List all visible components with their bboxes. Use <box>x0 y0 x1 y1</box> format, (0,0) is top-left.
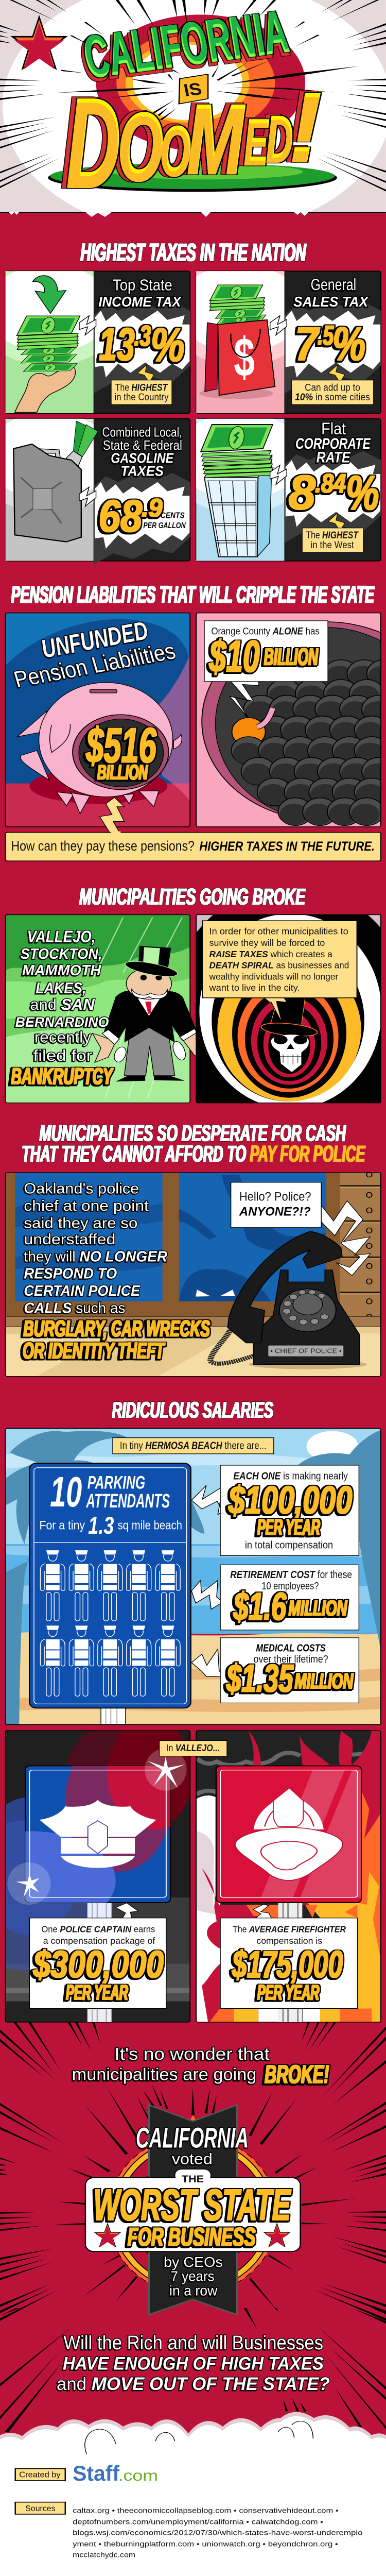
text: oakland police chief: RESPOND TO <box>24 1266 117 1282</box>
panel: firefighter <box>196 1731 381 2023</box>
panel frame <box>6 1731 190 2022</box>
callout: death spiral: RAISE TAXES which creates a <box>209 950 332 959</box>
text: oakland police chief: said they are so <box>24 1215 137 1231</box>
title word: doomed: D <box>66 72 120 214</box>
title word: doomed: E <box>244 106 269 178</box>
text: oakland police chief: understaffed <box>24 1231 115 1247</box>
sign heading: PARKING <box>87 1472 145 1493</box>
background tint <box>196 271 284 413</box>
jagged backdrop <box>94 301 190 394</box>
hole with figure <box>73 715 169 790</box>
note: highest in the country: The HIGHEST <box>115 382 168 393</box>
box: medical costs <box>220 1638 359 1703</box>
icon: rotary phone <box>210 1231 367 1369</box>
state name: CALIFORNIA <box>136 2122 249 2154</box>
title word: doomed: ! <box>289 72 321 182</box>
text: no wonder <box>72 2044 329 2089</box>
panel frame <box>196 613 381 827</box>
label: unfunded pension liabilities <box>11 616 179 692</box>
label: top state income tax: INCOME TAX <box>98 294 182 310</box>
head <box>126 968 171 999</box>
callout: orange county alone <box>204 621 328 682</box>
text: crime list <box>23 1316 210 1363</box>
sign subheading <box>40 1512 182 1539</box>
label: general sales tax: SALES TAX <box>293 294 369 310</box>
sign heading <box>50 1468 170 1516</box>
text: oakland police chief: CERTAIN POLICE <box>24 1283 141 1299</box>
number burst <box>286 311 380 377</box>
pictogram: ten attendants <box>40 1551 180 1696</box>
section: highest taxes <box>0 240 381 565</box>
sign subheading: 1.3 <box>88 1512 114 1539</box>
note: highest in the west <box>302 528 363 552</box>
text: cities filing bankruptcy: MAMMOTH <box>22 962 101 979</box>
sources label <box>15 2502 65 2514</box>
sources list: mcclatchydc.com <box>73 2550 135 2559</box>
created by label: Created by <box>19 2470 61 2479</box>
spiral rings <box>197 915 380 1103</box>
panel: bankruptcy <box>6 914 208 1103</box>
section: municipalities going broke <box>5 888 381 1162</box>
text: cities filing bankruptcy: STOCKTON, <box>21 946 102 962</box>
speed lines <box>0 2308 386 2432</box>
section: hermosa beach <box>5 1428 381 1724</box>
connector bolt <box>253 1904 272 1919</box>
section: police <box>6 1172 381 1422</box>
night backdrop with lights <box>0 1719 193 2022</box>
number: 13.3 percent: % <box>151 319 185 371</box>
icon: left star <box>95 2224 120 2247</box>
panel frame <box>196 914 381 1103</box>
speed lines <box>0 0 386 192</box>
sign heading: ATTENDANTS <box>86 1490 170 1512</box>
callout: death spiral: DEATH SPIRAL as businesses and <box>209 960 349 971</box>
text: no wonder: municipalities are going <box>72 2064 256 2084</box>
title word: doomed: D <box>267 103 293 176</box>
phone cord <box>210 1329 254 1364</box>
panel frame <box>196 1731 381 2022</box>
box: each one: in total compensation <box>245 1539 333 1551</box>
panel: police captain <box>5 1730 190 2023</box>
label: gasoline taxes: State & Federal <box>103 438 182 453</box>
text: oakland police chief: they will NO LONGER <box>24 1248 168 1265</box>
trouser pockets <box>112 1041 188 1063</box>
panel: top state income tax <box>5 270 190 414</box>
label: general sales tax <box>293 276 369 310</box>
label: flat corporate rate: RATE <box>317 449 351 466</box>
callout: in tiny hermosa beach: In tiny HERMOSA BEACH there are... <box>120 1439 267 1451</box>
cloud <box>0 2412 386 2484</box>
note: highest in the country <box>111 380 172 404</box>
worst state badge <box>85 2105 301 2315</box>
label: flat corporate rate <box>295 420 371 466</box>
text: no wonder: It's no wonder that <box>114 2044 270 2063</box>
text: by ceos: 7 years <box>170 2268 215 2284</box>
note: up to 10 percent: 10% in some cities <box>295 392 370 403</box>
sign board <box>216 1766 361 1903</box>
box: firefighter <box>220 1918 357 2009</box>
label: gasoline taxes: Combined Local, <box>102 425 182 439</box>
icon: bills in nozzle <box>66 421 98 466</box>
label: gasoline taxes: GASOLINE <box>111 450 174 466</box>
icon: hand <box>15 365 75 412</box>
sign post <box>101 1708 126 1724</box>
sign subheading: For a tiny <box>40 1518 85 1532</box>
banner: how can they pay: How can they pay these pensions? <box>11 839 195 854</box>
note: highest in the west: in the West <box>311 540 354 551</box>
text: no wonder: BROKE! <box>265 2060 329 2089</box>
note: up to 10 percent <box>292 380 374 404</box>
icon: office building <box>204 455 272 557</box>
green money rain backdrop <box>6 914 190 1103</box>
window right with monster <box>179 1173 326 1301</box>
box: police captain <box>29 1918 166 2009</box>
number: 68.9 cents per gallon: 68 <box>98 491 143 541</box>
state name: voted <box>172 2150 213 2167</box>
number: 7.5 percent: 7 <box>295 318 320 370</box>
box: police captain: $300,000 <box>33 1944 164 1986</box>
text: cities filing bankruptcy <box>11 928 114 1089</box>
callout: in vallejo <box>159 1741 227 1756</box>
state name <box>136 2122 249 2167</box>
callout: hello police: ANYONE?!? <box>239 1205 311 1218</box>
sky and floor <box>6 613 199 827</box>
label: top state income tax: Top State <box>113 276 172 294</box>
hole with figure: BILLION <box>97 760 148 784</box>
title word: doomed: M <box>187 84 245 195</box>
box: medical costs: over their lifetime? <box>254 1653 328 1665</box>
badge: is: IS <box>182 79 203 100</box>
hands and cuffs <box>92 1029 208 1062</box>
sign post <box>278 1903 302 2022</box>
box: medical costs: MEDICAL COSTS <box>256 1641 326 1654</box>
callout: death spiral: survive they will be forced to <box>209 938 325 948</box>
header backdrop <box>0 0 386 213</box>
headline: for business: FOR BUSINESS <box>128 2222 256 2251</box>
label: unfunded pension liabilities: UNFUNDED <box>38 616 151 663</box>
text: by ceos: in a row <box>169 2282 218 2299</box>
phone dial <box>279 1289 336 1332</box>
spiked medal <box>108 2115 278 2294</box>
panel frame <box>6 1173 381 1377</box>
callout bolt <box>328 513 345 531</box>
callout: in vallejo: In VALLEJO... <box>166 1742 220 1753</box>
label tab <box>175 2169 211 2188</box>
phone name plate <box>268 1346 343 1357</box>
panel: general sales tax <box>196 270 381 414</box>
jagged backdrop <box>284 451 381 543</box>
panel frame <box>6 271 190 413</box>
sources list: deptofnumbers.com/unemployment/california • calwatchdog.com • <box>73 2517 323 2526</box>
icon: shopping bag <box>205 320 275 395</box>
light flares <box>7 1749 187 1905</box>
box: medical costs: $1.35 <box>226 1657 294 1700</box>
sources list: yment • theburningplatform.com • unionwatch.org • beyondchron.org • <box>73 2540 338 2548</box>
speed lines <box>0 2022 386 2321</box>
text: cities filing bankruptcy: and SAN <box>30 996 95 1013</box>
header: title artwork <box>0 0 386 236</box>
phone name plate: • CHIEF OF POLICE • <box>270 1347 342 1355</box>
section: vallejo <box>0 1719 381 2023</box>
text: oakland police chief: CALLS such as <box>24 1300 125 1316</box>
box: police captain: One POLICE CAPTAIN earns <box>41 1924 155 1935</box>
section: footer <box>0 2308 386 2559</box>
box: retirement cost: 10 employees? <box>261 1580 319 1591</box>
callout bolt <box>100 798 125 834</box>
text: oakland police chief: Oakland's police <box>24 1181 139 1197</box>
icon: police cap <box>40 1800 156 1868</box>
panel frame <box>6 419 190 561</box>
trousers <box>125 1026 175 1076</box>
callout: death spiral: want to live in the city. <box>209 983 300 993</box>
ribbon <box>149 2105 237 2315</box>
beach backdrop <box>5 1428 381 1724</box>
logo: staff.com: Staff <box>73 2461 120 2485</box>
speech tail <box>264 995 287 1022</box>
sign heading: 10 <box>50 1468 82 1516</box>
jacket <box>103 991 197 1043</box>
icon: money stack <box>17 316 80 372</box>
number burst <box>95 482 189 549</box>
sources label: Sources <box>25 2504 56 2513</box>
text: cities filing bankruptcy: LAKES, <box>36 979 86 997</box>
text: by ceos <box>164 2254 223 2299</box>
shirt and tie <box>138 998 160 1016</box>
icon: money stack <box>201 424 274 478</box>
created by label <box>15 2469 65 2481</box>
sign post <box>87 1903 112 2022</box>
note: up to 10 percent: Can add up to <box>305 382 360 393</box>
icon: piggy bank <box>17 683 182 814</box>
text: cities filing bankruptcy: BERNARDINO <box>15 1014 109 1030</box>
rotten apple barrel <box>196 613 386 827</box>
word: the: THE <box>182 2174 204 2184</box>
number: 68.9 cents per gallon: CENTS <box>161 511 185 520</box>
sign board <box>25 1765 171 1903</box>
number: 13.3 percent: .3 <box>134 320 151 352</box>
callout: orange county alone: BILLION <box>264 644 319 670</box>
phone shadow <box>249 1360 367 1369</box>
section: pension liabilities <box>6 582 386 861</box>
green ground oval <box>48 163 337 192</box>
jagged backdrop <box>284 301 381 394</box>
label: top state income tax <box>98 276 182 310</box>
number burst <box>95 311 189 377</box>
connector bolt <box>116 1903 138 1919</box>
sign board <box>29 1463 191 1708</box>
pig details <box>50 689 117 753</box>
icon: jerry can <box>13 444 81 542</box>
label: gasoline taxes: TAXES <box>120 463 164 479</box>
panel: bankruptcy: BANKRUPTCY <box>11 1063 114 1089</box>
icon: fire helmet <box>235 1788 343 1880</box>
top hat <box>124 946 180 979</box>
white burst circle <box>3 0 386 236</box>
text: oakland police chief <box>24 1181 168 1316</box>
fire sign <box>216 1766 361 1903</box>
police sign <box>0 1719 203 1930</box>
panel frame <box>6 914 190 1103</box>
phone base <box>254 1270 359 1364</box>
callout: orange county alone: Orange County ALONE has <box>211 625 320 637</box>
sign subheading: sq mile beach <box>118 1518 182 1532</box>
floor <box>6 1327 381 1377</box>
box: retirement cost: RETIREMENT COST for these <box>230 1568 352 1581</box>
callout: orange county alone: $10 <box>209 632 260 681</box>
connector bolt <box>79 487 96 506</box>
text: cities filing bankruptcy: recently <box>34 1028 91 1046</box>
parking attendants sign <box>29 1463 191 1708</box>
icon: tycoon character <box>92 946 208 1081</box>
note: highest in the west: The HIGHEST <box>306 530 359 541</box>
box: retirement cost: $1.6 <box>233 1585 287 1628</box>
title word: doomed: O <box>160 112 191 191</box>
text: cities filing bankruptcy: VALLEJO, <box>27 928 96 946</box>
concentric rings behind title <box>96 14 305 151</box>
connector bolt <box>270 465 287 485</box>
sources list <box>73 2506 363 2559</box>
callout: death spiral <box>202 921 357 998</box>
speech tail: ring bolt <box>319 1201 371 1276</box>
heading: cannot afford police <box>22 1121 365 1167</box>
icon: california star <box>12 17 66 70</box>
hole with figure: $516 <box>86 718 156 773</box>
callout bolt <box>137 365 154 382</box>
number: 68.9 cents per gallon: PER GALLON <box>143 520 186 530</box>
number: 7.5 percent: % <box>332 318 365 370</box>
white plate <box>85 2178 301 2251</box>
text: will the rich <box>57 2332 330 2394</box>
note: highest in the country: in the Country <box>114 392 169 403</box>
icon: green arrow <box>33 276 66 313</box>
number: 68.9 cents per gallon: .9 <box>142 494 163 522</box>
label: gasoline taxes <box>102 425 182 479</box>
icon: shopping bag: $ <box>234 326 255 388</box>
panel frame <box>6 1428 381 1724</box>
icon: money above bag <box>209 285 266 325</box>
label: general sales tax: General <box>311 276 356 294</box>
connector bolt <box>270 316 287 335</box>
fire backdrop <box>196 1731 381 2023</box>
box: police captain: a compensation package of <box>43 1936 155 1946</box>
background tint <box>5 271 94 413</box>
text: crime list: OR IDENTITY THEFT <box>23 1338 165 1363</box>
box: each one: EACH ONE is making nearly <box>233 1469 348 1482</box>
section: conclusion <box>0 2022 386 2321</box>
box: firefighter: compensation is <box>256 1936 322 1946</box>
callout: in tiny hermosa beach <box>113 1438 274 1454</box>
callout: hello police: Hello? Police? <box>239 1190 311 1204</box>
plate tab fill <box>176 2177 210 2179</box>
text: cities filing bankruptcy: filed for <box>33 1047 92 1064</box>
bolt connectors <box>191 1485 223 1676</box>
badge: is <box>179 74 208 104</box>
panel frame <box>6 613 190 827</box>
callout: death spiral: wealthy individuals will no longer <box>209 972 338 982</box>
number burst <box>286 460 380 527</box>
callout: hello police <box>231 1182 321 1228</box>
sources list: caltax.org • theeconomiccollapseblog.com • conservativehideout.com • <box>73 2506 339 2515</box>
room wood backdrop <box>6 1173 381 1327</box>
banner: how can they pay <box>6 832 381 861</box>
number: 13.3 percent: 13 <box>99 318 135 370</box>
text: oakland police chief: chief at one point <box>24 1198 149 1214</box>
panel: unfunded pension liabilities <box>6 613 199 827</box>
box: each one <box>220 1465 359 1556</box>
label: flat corporate rate: Flat <box>321 420 346 438</box>
box: police captain: PER YEAR <box>66 1981 128 2004</box>
title word: doomed: O <box>118 93 163 201</box>
speech tail <box>230 681 259 718</box>
panel: gasoline taxes <box>5 418 190 565</box>
panel: chief of police <box>6 1172 381 1377</box>
text: by ceos: by CEOs <box>164 2254 223 2270</box>
phone handset <box>227 1231 342 1343</box>
number: 7.5 percent: .5 <box>318 320 334 351</box>
wall panels <box>340 1172 381 1327</box>
logo: staff.com: .com <box>118 2466 158 2484</box>
icon: skull in top hat <box>260 996 319 1072</box>
panel: death spiral <box>196 914 381 1104</box>
label: unfunded pension liabilities: Pension Liabilities <box>11 638 179 692</box>
number: 68.9 cents per gallon <box>98 491 186 541</box>
window left <box>15 1173 163 1301</box>
background tint <box>5 418 94 561</box>
box: retirement cost <box>220 1565 359 1630</box>
background tint <box>196 418 284 561</box>
shoes <box>116 1076 185 1081</box>
connector bolt <box>79 316 96 335</box>
icon: right star <box>264 2224 290 2247</box>
number: 8.84 percent: .84 <box>315 469 346 498</box>
window sill <box>6 1316 381 1327</box>
number: 8.84 percent: 8 <box>289 465 315 519</box>
panel: corporate rate <box>196 418 381 562</box>
panel: orange county <box>196 613 386 827</box>
callout bolt <box>328 365 345 382</box>
panel frame <box>196 271 381 413</box>
panel frame <box>196 419 381 561</box>
jagged backdrop <box>94 473 190 565</box>
